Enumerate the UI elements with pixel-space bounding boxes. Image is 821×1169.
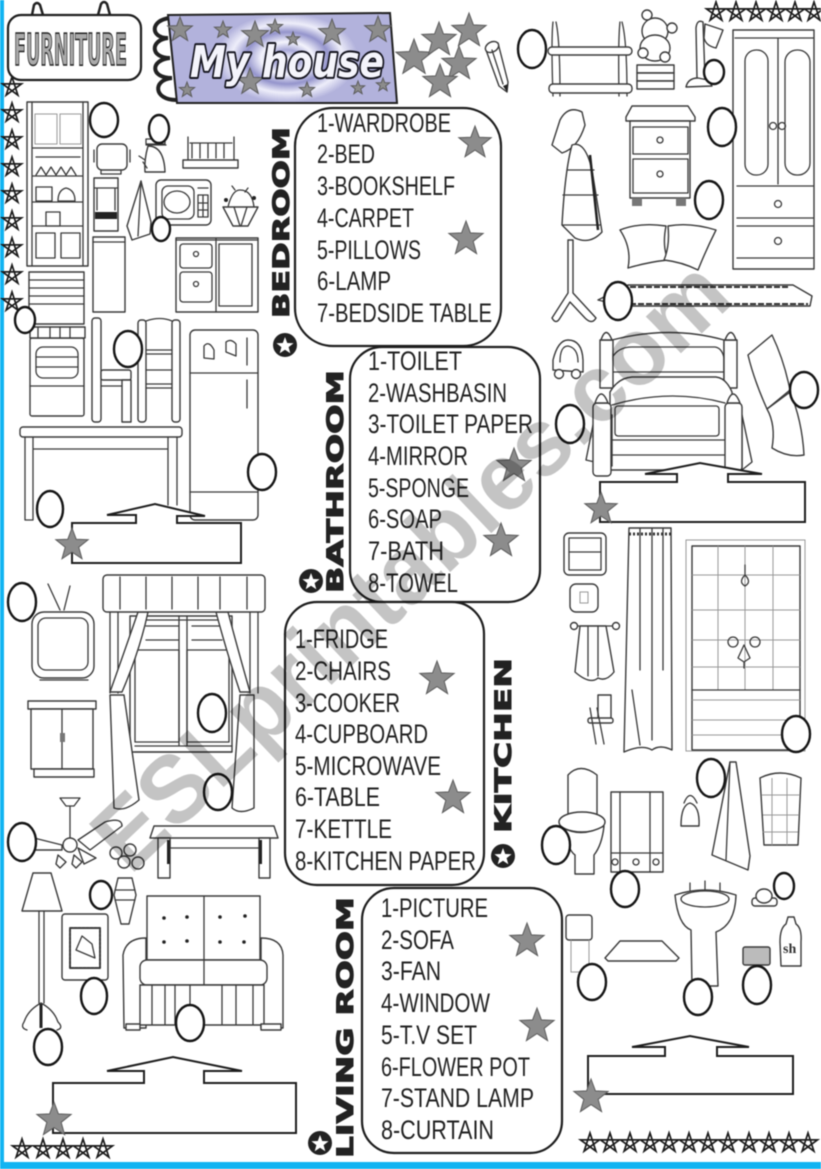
living room: ceiling fan [34, 798, 122, 868]
living room furniture [22, 575, 283, 1030]
bedroom: lamp [686, 21, 723, 87]
living room: picture [62, 914, 108, 980]
panel: living room word list [362, 888, 562, 1153]
bedroom: teddy bear on books [637, 10, 677, 89]
living room list text [381, 893, 534, 1145]
sign: FURNITURE [8, 2, 141, 80]
bullet: living room star badge [308, 1131, 332, 1155]
bedroom: coat stand [552, 110, 602, 321]
heading: BEDROOM: BEDROOM [270, 127, 295, 318]
kitchen list text: 2-CHAIRS [295, 656, 391, 686]
answer label: bedroom arrow box [600, 463, 805, 522]
bathroom list text: 7-BATH [368, 536, 444, 566]
living room list text: 6-FLOWER POT [381, 1052, 530, 1082]
kitchen: fruit bowl [223, 186, 258, 226]
bathroom: washbasin [675, 881, 736, 986]
bedroom list text: 6-LAMP [317, 266, 391, 296]
kitchen: blind [29, 272, 84, 324]
kitchen list text [295, 624, 476, 876]
answer label: living room arrow box [53, 1057, 296, 1133]
living room list text: 4-WINDOW [381, 988, 490, 1018]
living room list text: 8-CURTAIN [381, 1115, 494, 1145]
bullet: kitchen star badge [491, 844, 515, 868]
bathroom: soap [752, 889, 777, 906]
bedroom list text: 4-CARPET [317, 203, 414, 233]
panel: bathroom word list [350, 346, 540, 602]
kitchen: base cabinet [93, 237, 125, 312]
bathroom: wall lamp [681, 796, 699, 826]
bedroom: bed [586, 332, 752, 476]
living room list text: 3-FAN [381, 956, 441, 986]
star border: bottom right [580, 1133, 818, 1151]
kitchen: chair one [92, 318, 131, 422]
bedroom list text: 1-WARDROBE [317, 108, 451, 138]
watermark: ESLprintables.com: ESLprintables.com [71, 239, 750, 891]
kitchen: dish rack [183, 137, 238, 168]
bedroom list text: 7-BEDSIDE TABLE [317, 298, 492, 328]
banner title: My house [190, 37, 384, 88]
bedroom list text: 5-PILLOWS [317, 235, 421, 265]
bathroom: mirror [611, 792, 663, 872]
kitchen list text: 6-TABLE [295, 782, 380, 812]
bathroom: toilet [559, 768, 605, 874]
kitchen: cupboard [27, 102, 88, 266]
bathroom list text: 3-TOILET PAPER [368, 409, 533, 439]
bathroom: toothbrush holder [588, 695, 613, 744]
heading: BATHROOM: BATHROOM [324, 370, 349, 593]
kitchen: kettle [139, 139, 166, 172]
bathroom list text: 4-MIRROR [368, 441, 468, 471]
bathroom furniture [559, 528, 805, 986]
heading: LIVING ROOM: LIVING ROOM [334, 897, 359, 1158]
heading: KITCHEN: KITCHEN [492, 658, 517, 833]
bedroom: bedside table [626, 106, 695, 206]
living room: bench [150, 826, 278, 878]
bathroom: towel on rail [570, 622, 620, 680]
star border: bottom left [12, 1139, 113, 1157]
bullet: bedroom star badge [273, 333, 297, 357]
kitchen list text: 1-FRIDGE [295, 624, 388, 654]
living room list text: 7-STAND LAMP [381, 1083, 534, 1113]
bedroom: pillow pair [620, 225, 716, 270]
kitchen list text: 4-CUPBOARD [295, 719, 428, 749]
bathroom: hanging towel [712, 762, 750, 870]
bathroom list text: 1-TOILET [368, 346, 462, 376]
kitchen list text: 5-MICROWAVE [295, 751, 441, 781]
living room list text: 1-PICTURE [381, 893, 488, 923]
decorative grey stars on panels and labels [37, 126, 617, 1135]
living room: flower pot [110, 844, 144, 924]
kitchen: chair two [138, 318, 180, 422]
living room: sofa [123, 896, 283, 1030]
bathroom list text [368, 346, 533, 598]
bathroom list text: 2-WASHBASIN [368, 378, 507, 408]
bathroom: bath mat [605, 941, 679, 961]
living room: tv set [32, 584, 94, 680]
living room: tv cabinet [28, 701, 96, 777]
bedroom: bookshelf [548, 22, 632, 96]
bedroom furniture [548, 10, 814, 476]
text: FURNITURE [14, 25, 127, 76]
bathroom: shampoo [780, 917, 801, 966]
bathroom: bath and tiles [686, 540, 805, 751]
panel: kitchen word list [285, 602, 484, 885]
bullet: bathroom star badge [299, 569, 323, 593]
bathroom: sponge [743, 947, 770, 965]
kitchen furniture [20, 102, 258, 520]
star border: left column [2, 77, 22, 310]
decorative grey stars beside banner [396, 13, 486, 97]
bathroom: soap dish [570, 584, 598, 612]
star border: top right [706, 2, 821, 20]
bedroom: carpet [598, 285, 812, 306]
bathroom: toilet paper [566, 915, 592, 972]
icon: pencil [483, 39, 508, 92]
banner: My house [155, 13, 397, 103]
kitchen list text: 8-KITCHEN PAPER [295, 846, 476, 876]
answer label: kitchen arrow box [72, 504, 241, 563]
bathroom list text: 5-SPONGE [368, 473, 469, 503]
bathroom: shampoo: sh [783, 942, 796, 957]
kitchen: sink unit [176, 238, 258, 312]
bedroom list text: 2-BED [317, 139, 375, 169]
bathroom: shower curtain [624, 528, 672, 752]
kitchen: cooker [30, 327, 85, 416]
banner spiral binding [155, 18, 176, 100]
bathroom: sponge tray [564, 533, 606, 575]
living room: window with curtains [103, 575, 265, 812]
bedroom: toy car [553, 340, 583, 378]
answer label: bathroom arrow box [588, 1036, 793, 1094]
living room list text: 5-T.V SET [381, 1020, 477, 1050]
bedroom list text [317, 108, 492, 328]
kitchen: coffee maker [94, 178, 118, 231]
kitchen: table [20, 427, 182, 520]
bathroom list text: 8-TOWEL [368, 568, 458, 598]
bedroom: wardrobe [733, 30, 814, 269]
kitchen list text: 7-KETTLE [295, 814, 392, 844]
kitchen: towel [127, 181, 151, 240]
kitchen: microwave [156, 180, 211, 225]
living room: stand lamp [22, 873, 62, 1030]
bedroom list text: 3-BOOKSHELF [317, 171, 455, 201]
kitchen list text: 3-COOKER [295, 688, 400, 718]
kitchen: fridge [190, 330, 258, 520]
panel: bedroom word list [295, 108, 501, 346]
bedroom: pillow single [748, 335, 804, 456]
kitchen: pot [94, 144, 130, 174]
bathroom list text: 6-SOAP [368, 504, 442, 534]
living room list text: 2-SOFA [381, 925, 454, 955]
bathroom: laundry basket [760, 773, 801, 845]
